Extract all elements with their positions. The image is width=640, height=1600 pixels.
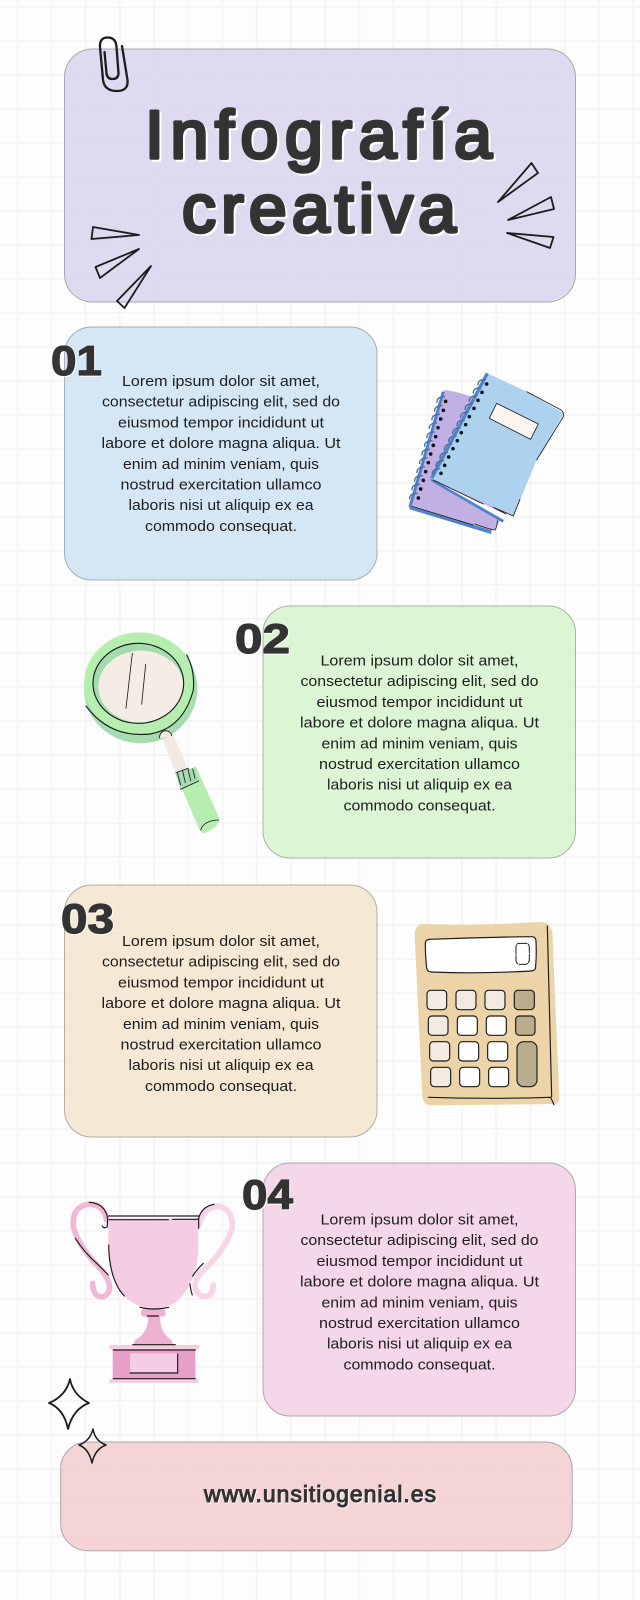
text block 02 bbox=[300, 652, 540, 814]
text block 03 bbox=[102, 933, 341, 1095]
number 02: 02 bbox=[236, 616, 291, 663]
text block 04: commodo consequat. bbox=[344, 1356, 496, 1373]
panel: step 03 bbox=[61, 885, 377, 1137]
icon: notebooks bbox=[408, 373, 564, 534]
text block 03: nostrud exercitation ullamco bbox=[120, 1036, 322, 1054]
text block 01: nostrud exercitation ullamco bbox=[120, 476, 322, 494]
text block 01: commodo consequat. bbox=[145, 518, 297, 535]
number 04: 04 bbox=[242, 1171, 294, 1218]
text block 04: labore et dolore magna aliqua. Ut bbox=[300, 1274, 540, 1291]
icon: trophy bbox=[73, 1202, 232, 1383]
text block 02: nostrud exercitation ullamco bbox=[319, 756, 520, 773]
number 04: 04 bbox=[243, 1172, 295, 1219]
icon: paperclip bbox=[100, 38, 128, 91]
number 03: 03 bbox=[61, 895, 114, 942]
title: Infografía bbox=[147, 99, 494, 175]
text block 01: labore et dolore magna aliqua. Ut bbox=[102, 435, 341, 452]
text block 02: eiusmod tempor incididunt ut bbox=[316, 694, 523, 711]
icon: burst lines right bbox=[498, 163, 554, 248]
text block 03: commodo consequat. bbox=[145, 1078, 297, 1095]
number 02: 02 bbox=[235, 615, 290, 662]
icon: large sparkle bbox=[49, 1379, 89, 1429]
panel: step 02 bbox=[235, 606, 576, 858]
text block 03: eiusmod tempor incididunt ut bbox=[118, 974, 325, 991]
text block 03: enim ad minim veniam, quis bbox=[123, 1016, 319, 1033]
number 01: 01 bbox=[51, 337, 102, 384]
text block 04: enim ad minim veniam, quis bbox=[322, 1294, 518, 1311]
text block 04: nostrud exercitation ullamco bbox=[319, 1315, 520, 1332]
panel: step 04 bbox=[242, 1163, 576, 1416]
icon: small sparkle bbox=[79, 1429, 106, 1463]
text block 04: eiusmod tempor incididunt ut bbox=[316, 1253, 523, 1270]
text block 02: consectetur adipiscing elit, sed do bbox=[300, 673, 538, 690]
text block 01 bbox=[102, 373, 341, 535]
text block 02: enim ad minim veniam, quis bbox=[322, 735, 518, 752]
text block 03: labore et dolore magna aliqua. Ut bbox=[102, 995, 341, 1012]
number 01: 01 bbox=[52, 338, 103, 385]
panel: footer bbox=[61, 1442, 572, 1551]
panel: step 01 bbox=[51, 327, 377, 580]
title bbox=[145, 97, 494, 249]
number 03: 03 bbox=[62, 896, 115, 943]
text block 04: Lorem ipsum dolor sit amet, bbox=[320, 1212, 518, 1228]
text block 04 bbox=[300, 1212, 540, 1373]
icon: calculator bbox=[415, 922, 559, 1105]
text block 04: consectetur adipiscing elit, sed do bbox=[300, 1232, 538, 1249]
text block 03: Lorem ipsum dolor sit amet, bbox=[122, 933, 320, 950]
text block 01: eiusmod tempor incididunt ut bbox=[118, 414, 325, 431]
text block 01: enim ad minim veniam, quis bbox=[123, 456, 319, 473]
text block 02: Lorem ipsum dolor sit amet, bbox=[320, 652, 518, 670]
text block 02: laboris nisi ut aliquip ex ea bbox=[327, 777, 513, 794]
title: creativa bbox=[184, 173, 458, 249]
icon: spiral holes bbox=[417, 382, 488, 499]
text block 04: laboris nisi ut aliquip ex ea bbox=[327, 1336, 513, 1353]
website url: www.unsitiogenial.es bbox=[204, 1482, 437, 1508]
text block 02: commodo consequat. bbox=[344, 797, 496, 814]
website url: www.unsitiogenial.es bbox=[203, 1481, 436, 1507]
icon: burst lines left bbox=[92, 227, 151, 308]
text block 03: consectetur adipiscing elit, sed do bbox=[102, 954, 340, 971]
panel: title bbox=[64, 49, 576, 302]
text block 01: laboris nisi ut aliquip ex ea bbox=[128, 497, 314, 514]
text block 01: consectetur adipiscing elit, sed do bbox=[102, 394, 340, 411]
text block 01: Lorem ipsum dolor sit amet, bbox=[122, 373, 320, 390]
text block 02: labore et dolore magna aliqua. Ut bbox=[300, 715, 540, 732]
title: Infografía bbox=[145, 97, 492, 173]
icon: magnifying glass bbox=[84, 632, 219, 833]
text block 03: laboris nisi ut aliquip ex ea bbox=[128, 1057, 314, 1074]
title: creativa bbox=[182, 171, 456, 247]
